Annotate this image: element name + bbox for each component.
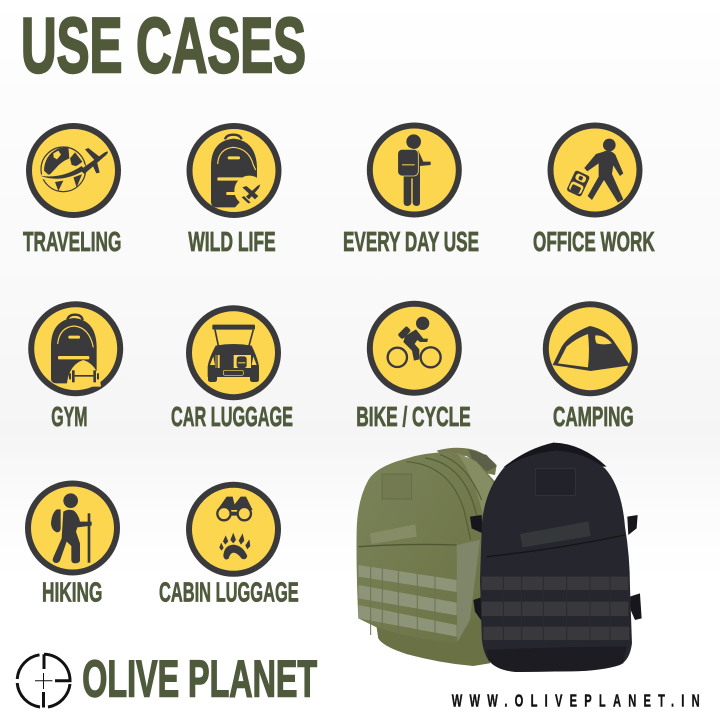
label: traveling: TRAVELING — [23, 226, 121, 257]
icon: cabin luggage — [189, 485, 278, 574]
icon: bike cycle — [370, 304, 459, 393]
label: car luggage: CAR LUGGAGE — [171, 401, 293, 432]
icon: camping — [546, 304, 635, 393]
label: camping: CAMPING — [553, 401, 634, 432]
label: wild life: WILD LIFE — [188, 226, 276, 257]
icon: traveling — [29, 126, 118, 215]
icon: gym — [31, 304, 120, 393]
label: every day use: EVERY DAY USE — [343, 226, 479, 257]
logo wordmark: OLIVE PLANET — [82, 650, 317, 708]
backpack: black — [470, 443, 642, 672]
logo icon: crosshair — [17, 654, 70, 708]
icon: wild life — [190, 126, 278, 215]
label: cabin luggage: CABIN LUGGAGE — [159, 576, 299, 608]
label: hiking: HIKING — [42, 576, 102, 608]
icon: car luggage — [189, 308, 278, 397]
icon: every day use — [370, 126, 459, 214]
icon: office work — [550, 126, 640, 214]
label: bike cycle: BIKE / CYCLE — [356, 401, 471, 432]
title: USE CASES — [21, 1, 306, 89]
label: gym: GYM — [51, 401, 88, 432]
icon: hiking — [28, 484, 117, 572]
backpack: olive — [357, 448, 497, 666]
website url: WWW.OLIVEPLANET.IN — [452, 691, 700, 711]
